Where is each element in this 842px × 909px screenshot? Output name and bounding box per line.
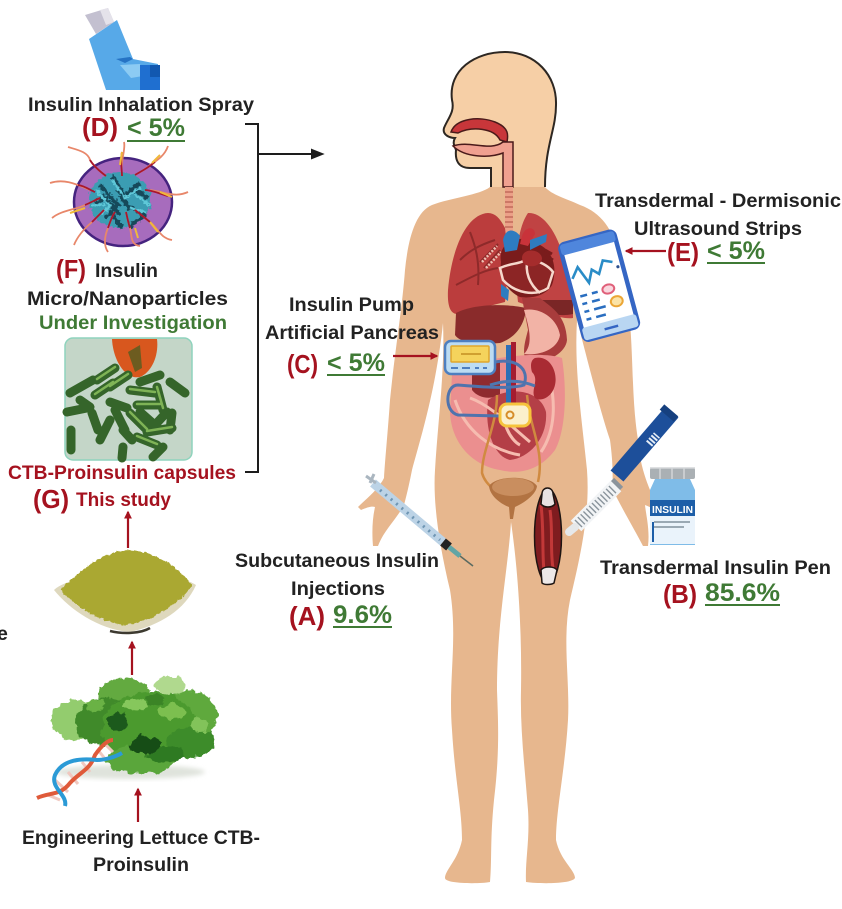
- caption: CTB-proinsulin capsules: (G): [33, 484, 69, 514]
- arrow: lettuce to powder: [131, 642, 133, 675]
- label C: insulin pump: < 5%: [327, 349, 385, 377]
- label E: ultrasound strips: < 5%: [707, 237, 765, 265]
- icon: muscle: [534, 488, 562, 584]
- label C: insulin pump: Artificial Pancreas: [265, 322, 439, 344]
- label E: ultrasound strips: Transdermal - Dermisonic: [595, 190, 841, 212]
- organs: heart: [500, 228, 554, 301]
- airway and throat: [451, 119, 513, 235]
- label A: subcutaneous injections: 9.6%: [333, 601, 392, 629]
- heading: inhalation spray: < 5%: [127, 114, 185, 142]
- label C: insulin pump: Insulin Pump: [289, 294, 414, 316]
- caption: CTB-proinsulin capsules: [8, 462, 236, 514]
- caption: engineering lettuce: Engineering Lettuce CTB-: [22, 827, 260, 849]
- organs: bladder: [489, 478, 537, 519]
- head: [444, 52, 556, 187]
- arrow: C to pump: [393, 355, 437, 357]
- label A: subcutaneous injections: [235, 550, 439, 631]
- label A: subcutaneous injections: Subcutaneous Insulin: [235, 550, 439, 572]
- caption: engineering lettuce: Proinsulin: [93, 854, 189, 876]
- label A: subcutaneous injections: (A): [289, 601, 325, 631]
- icon: ultrasound strip phone: [559, 231, 639, 341]
- organs: intestines: [450, 355, 565, 472]
- label C: insulin pump: [265, 294, 439, 379]
- icon: insulin pen: [569, 407, 676, 532]
- label B: transdermal insulin pen: [600, 557, 831, 609]
- capsules: [67, 368, 185, 458]
- text: insulin micro nanoparticles: [27, 254, 228, 334]
- insulin pod: [500, 404, 530, 426]
- organs: kidney and vessels: [482, 342, 556, 488]
- text: insulin micro nanoparticles: Insulin: [95, 260, 158, 282]
- label E: ultrasound strips: Ultrasound Strips: [634, 218, 802, 240]
- caption: CTB-proinsulin capsules: CTB-Proinsulin capsules: [8, 462, 236, 484]
- image: lettuce: [51, 676, 217, 779]
- icon: insulin pump with tubing: [445, 341, 530, 426]
- icon: insulin nanoparticle: [50, 142, 188, 252]
- label C: insulin pump: (C): [287, 349, 318, 379]
- label A: subcutaneous injections: Injections: [291, 578, 385, 600]
- text: insulin micro nanoparticles: (F): [56, 254, 86, 284]
- human body silhouette: [358, 52, 657, 883]
- organs: lungs: [448, 213, 573, 318]
- icon: insulin vial: [650, 468, 695, 545]
- heading: inhalation spray: (D): [82, 112, 118, 142]
- text: insulin micro nanoparticles: Under Investigation: [39, 312, 227, 334]
- caption: engineering lettuce: [22, 827, 260, 876]
- label B: transdermal insulin pen: (B): [663, 579, 697, 609]
- icon: insulin vial: INSULIN: [652, 505, 693, 516]
- caption: CTB-proinsulin capsules: This study: [76, 489, 171, 511]
- image: lettuce powder bowl: [54, 550, 196, 633]
- photo: CTB-proinsulin capsules: [65, 338, 192, 460]
- arrow: E to phone: [626, 250, 666, 252]
- arrow: powder to capsules: [127, 512, 129, 548]
- text: insulin micro nanoparticles: Micro/Nanoparticles: [27, 288, 228, 310]
- heading: inhalation spray: Insulin Inhalation Spray: [28, 94, 254, 116]
- label B: transdermal insulin pen: Transdermal Insulin Pen: [600, 557, 831, 579]
- arrow: engineering to lettuce: [137, 789, 139, 822]
- icon: inhaler: [85, 8, 160, 90]
- icon: syringe: [366, 474, 473, 566]
- label E: ultrasound strips: (E): [667, 237, 699, 267]
- heading: inhalation spray: [28, 94, 254, 142]
- organs: liver, stomach: [455, 298, 573, 364]
- icon: DNA helix: [37, 740, 122, 806]
- label B: transdermal insulin pen: 85.6%: [705, 579, 780, 607]
- bracket with arrow to body: [245, 124, 322, 472]
- label E: ultrasound strips: [595, 190, 841, 267]
